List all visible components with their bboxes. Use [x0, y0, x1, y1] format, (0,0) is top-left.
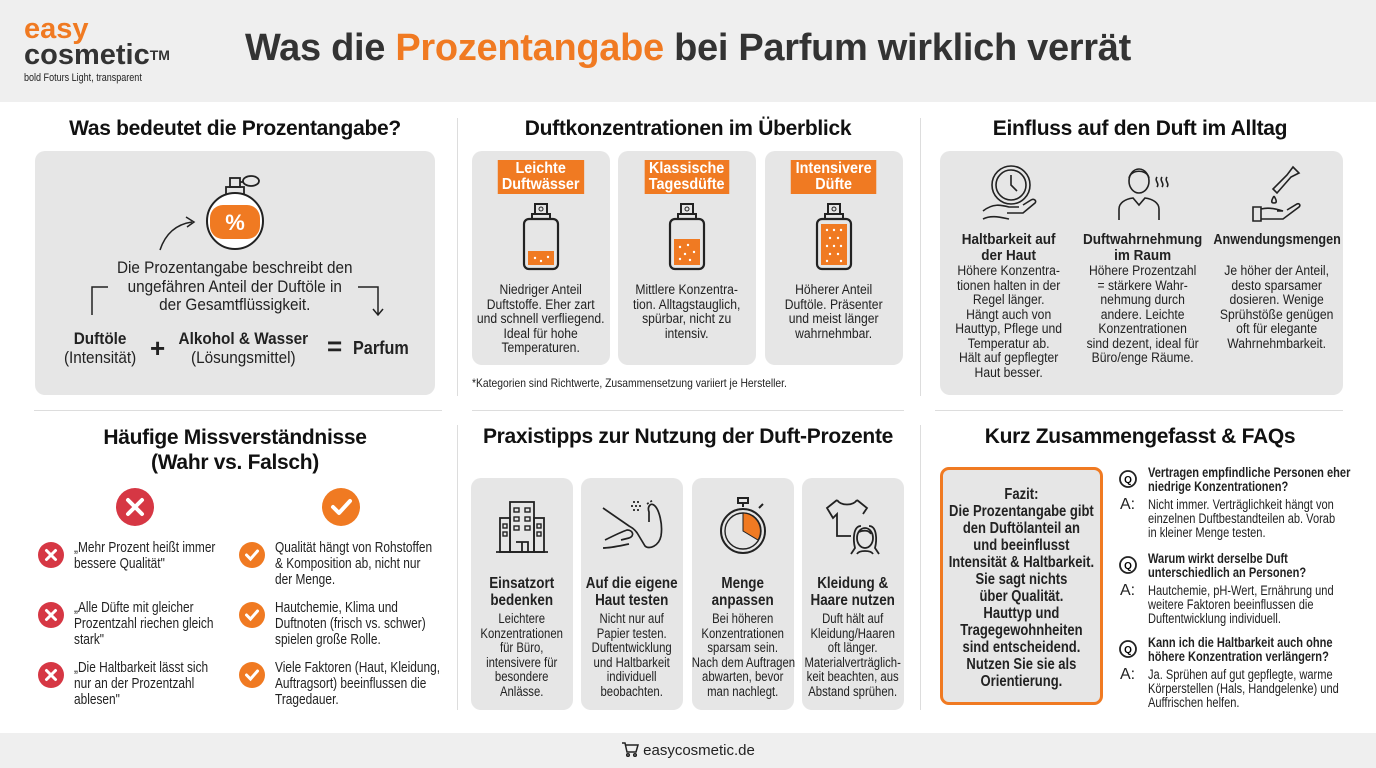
list: wahr: Auftragsort) beeinflussen die — [275, 676, 426, 692]
heading: Was bedeutet die Prozentangabe? — [69, 117, 401, 140]
FAQ list: Auffrischen helfen. — [1148, 695, 1239, 710]
heading: Häufige Missverständnisse — [103, 426, 367, 449]
card: intensiv: und meist länger — [789, 311, 879, 326]
formula — [64, 329, 409, 367]
list: wahr: & Komposition ab, nicht nur — [275, 556, 420, 572]
item: Raum: nehmung durch — [1101, 292, 1185, 307]
list: falsch: „Die Haltbarkeit lässt sich — [74, 660, 208, 676]
callout: Fazit: Nutzen Sie sie als — [967, 656, 1077, 673]
callout: Fazit: Hauttyp und — [984, 605, 1059, 622]
callout: Fazit: Sie sagt nichts — [976, 571, 1067, 588]
card: klassisch: Klassische — [649, 160, 725, 177]
card: Kleidung: Materialverträglich- — [805, 654, 901, 670]
card: Kleidung: oft länger. — [828, 640, 878, 655]
text block: ungefähren Anteil der Duftöle in — [128, 276, 342, 296]
card: Menge: Menge — [722, 575, 764, 592]
formula: (Lösungsmittel) — [191, 348, 295, 367]
panel: Duftkonzentrationen — [472, 116, 903, 390]
card: Einsatzort: besondere — [495, 669, 549, 684]
gray box — [35, 151, 435, 395]
FAQ list: Q — [1124, 475, 1132, 486]
heading: Duftkonzentrationen im Überblick — [525, 117, 851, 140]
logo: easy — [24, 13, 89, 45]
text block: Die Prozentangabe beschreibt den — [117, 258, 353, 277]
callout: Fazit: und beeinflusst — [973, 537, 1070, 554]
FAQ list: A: — [1120, 666, 1135, 683]
callout: Fazit: sind entscheidend. — [963, 639, 1080, 656]
callout: Fazit: den Duftölanteil an — [963, 520, 1080, 537]
card: intensiv: Düfte — [816, 176, 852, 193]
card: Haut testen: Nicht nur auf — [600, 611, 664, 626]
text block — [117, 258, 353, 314]
list: falsch: Prozentzahl riechen gleich — [74, 616, 213, 632]
footer — [0, 733, 1376, 768]
footer: easycosmetic.de — [643, 742, 755, 759]
card: Kleidung: Duft hält auf — [822, 611, 884, 626]
item: Haltbarkeit: Hängt auch von — [966, 306, 1052, 322]
panel: Einfluss — [940, 117, 1343, 395]
card: Menge: sparsam sein. — [708, 640, 778, 655]
card: Kleidung: Abstand sprühen. — [809, 684, 897, 698]
formula: = — [327, 331, 342, 361]
item: Haltbarkeit: Hauttyp, Pflege und — [956, 321, 1062, 336]
card: intensiv: Höherer Anteil — [795, 282, 873, 297]
card: Menge: Nach dem Auftragen — [692, 654, 795, 670]
item: Haltbarkeit: Haut besser. — [975, 364, 1043, 380]
list: falsch: „Mehr Prozent heißt immer — [74, 540, 215, 556]
card: intensiv: Intensivere — [796, 160, 872, 177]
card: intensiv: Duftöle. Präsenter — [785, 296, 883, 312]
card: leicht: Duftstoffe. Eher zart — [487, 296, 595, 312]
card: Kleidung: Haare nutzen — [811, 592, 895, 609]
heading: (Wahr vs. Falsch) — [151, 451, 319, 474]
card: intensiv: wahrnehmbar. — [795, 326, 873, 340]
card: Haut testen: beobachten. — [601, 684, 663, 698]
card: Haut testen: Duftentwicklung — [592, 640, 672, 655]
item: Haltbarkeit: Höhere Konzentra- — [958, 263, 1060, 278]
card: Haut testen: Haut testen — [595, 592, 669, 609]
item: Anwendungsmengen: Sprühstöße genügen — [1220, 306, 1334, 322]
FAQ list: Nicht immer. Verträglichkeit hängt von — [1148, 497, 1334, 512]
formula: (Intensität) — [64, 348, 136, 367]
FAQ list: Q — [1124, 645, 1132, 656]
list: wahr: Viele Faktoren (Haut, Kleidung, — [275, 660, 440, 676]
card: Einsatzort: intensivere für — [486, 654, 558, 670]
header band — [0, 0, 1376, 102]
FAQ list: Ja. Sprühen auf gut gepflegte, warme — [1148, 667, 1333, 682]
list: falsch: „Alle Düfte mit gleicher — [74, 600, 194, 616]
item: Anwendungsmengen — [1213, 166, 1341, 350]
card: leicht — [472, 151, 610, 365]
panel: Praxistipps — [471, 425, 904, 710]
formula: Duftöle — [74, 329, 126, 348]
icon: perfume bottle: % — [225, 210, 245, 235]
FAQ list: A: — [1120, 496, 1135, 513]
text block: der Gesamtflüssigkeit. — [159, 295, 311, 314]
heading: Praxistipps zur Nutzung der Duft-Prozente — [483, 425, 893, 448]
formula: + — [150, 333, 165, 363]
card: klassisch: tion. Alltagstauglich, — [633, 296, 741, 312]
FAQ list: Kann ich die Haltbarkeit auch ohne — [1148, 635, 1333, 650]
item: Raum: sind dezent, ideal für — [1087, 336, 1199, 350]
item: Raum: Duftwahrnehmung — [1083, 231, 1203, 248]
item: Raum: im Raum — [1114, 247, 1172, 264]
item: Anwendungsmengen: Wahrnehmbarkeit. — [1228, 336, 1326, 350]
item: Haltbarkeit: Temperatur ab. — [968, 336, 1050, 350]
item: Raum: andere. Leichte — [1101, 306, 1185, 322]
item: Haltbarkeit — [956, 165, 1062, 380]
item: Raum: Büro/enge Räume. — [1092, 350, 1194, 365]
card: Einsatzort: Anlässe. — [500, 684, 544, 698]
card: Kleidung: Kleidung & — [818, 575, 888, 592]
footnote: *Kategorien sind Richtwerte, Zusammensetzung variiert je Hersteller. — [472, 376, 787, 390]
logo — [24, 13, 170, 84]
list: wahr: Duftnoten (frisch vs. schwer) — [275, 616, 426, 632]
card: klassisch: Mittlere Konzentra- — [636, 282, 738, 297]
card: Einsatzort — [471, 478, 573, 710]
FAQ list — [1119, 465, 1350, 710]
card: leicht: Temperaturen. — [502, 340, 580, 355]
card: klassisch: spürbar, nicht zu — [642, 311, 732, 326]
FAQ list: Q — [1124, 561, 1132, 572]
card: Menge: man nachlegt. — [707, 684, 779, 698]
card: leicht: Duftwässer — [502, 176, 580, 193]
item: Raum: = stärkere Wahr- — [1098, 278, 1188, 292]
panel: Zusammengefasst — [940, 425, 1350, 710]
card: Einsatzort: Konzentrationen — [481, 626, 563, 640]
FAQ list: einzelnen Duftbestandteilen ab. Vorab — [1148, 511, 1335, 526]
bracket arrows — [91, 286, 384, 316]
list: falsch: ablesen" — [74, 692, 120, 708]
card: Menge: Bei höheren — [712, 611, 774, 626]
heading — [103, 426, 367, 474]
item: Haltbarkeit: tionen halten in der — [957, 278, 1061, 292]
item: Anwendungsmengen: Anwendungsmengen — [1213, 231, 1341, 248]
FAQ list: Duftentwicklung individuell. — [1148, 611, 1281, 626]
panel: Missverständnisse — [38, 426, 440, 708]
list: wahr: Tragedauer. — [275, 692, 339, 708]
FAQ list: weitere Faktoren beeinflussen die — [1148, 597, 1314, 612]
callout: Fazit — [940, 467, 1103, 705]
item: Anwendungsmengen: Je höher der Anteil, — [1225, 263, 1329, 278]
list: falsch: nur an der Prozentzahl — [74, 676, 194, 692]
formula: Parfum — [353, 338, 409, 358]
card: Haut testen: Papier testen. — [597, 626, 667, 640]
card: leicht: Leichte — [516, 160, 566, 177]
icon: big check — [322, 488, 360, 526]
callout: Fazit: Fazit: — [1005, 486, 1038, 503]
card: Menge: anpassen — [712, 592, 774, 609]
icon: perfume bottle — [159, 175, 264, 250]
FAQ list: in kleiner Menge testen. — [1148, 525, 1266, 540]
callout: Fazit: Tragegewohnheiten — [960, 622, 1083, 639]
FAQ list: Hautchemie, pH-Wert, Ernährung und — [1148, 583, 1334, 598]
item: Raum: Höhere Prozentzahl — [1089, 263, 1197, 278]
card: Einsatzort: für Büro, — [500, 640, 544, 655]
card: Kleidung: Kleidung/Haaren — [811, 626, 895, 640]
FAQ list: Körperstellen (Hals, Handgelenke) und — [1148, 681, 1339, 696]
item: Anwendungsmengen: desto sparsamer — [1232, 278, 1322, 292]
item: Haltbarkeit: Regel länger. — [973, 292, 1045, 307]
FAQ list: Warum wirkt derselbe Duft — [1148, 551, 1288, 566]
heading: Kurz Zusammengefasst & FAQs — [985, 425, 1295, 448]
callout: Fazit: Intensität & Haltbarkeit. — [949, 554, 1094, 571]
card: Einsatzort: Leichtere — [499, 611, 545, 626]
list: falsch: stark" — [74, 632, 104, 648]
card: klassisch: intensiv. — [665, 326, 709, 340]
card: leicht: Niedriger Anteil — [500, 282, 582, 297]
FAQ list: unterschiedlich an Personen? — [1148, 565, 1306, 580]
card: leicht: Ideal für hohe — [504, 326, 578, 340]
icon: cart — [622, 742, 639, 757]
logo: bold Foturs Light, transparent — [24, 72, 142, 84]
card: Haut testen: individuell — [607, 669, 657, 684]
card: Menge: abwarten, bevor — [702, 669, 784, 684]
item: Raum: Konzentrationen — [1099, 321, 1187, 336]
card: Haut testen — [581, 478, 683, 710]
list: wahr: Qualität hängt von Rohstoffen — [275, 540, 432, 556]
card: intensiv — [765, 151, 903, 365]
callout: Fazit: Die Prozentangabe gibt — [949, 503, 1094, 520]
card: klassisch: Tagesdüfte — [649, 176, 725, 193]
list: falsch: bessere Qualität" — [74, 556, 165, 572]
card: klassisch — [618, 151, 756, 365]
card: Einsatzort: Einsatzort — [490, 575, 554, 592]
card: Haut testen: Auf die eigene — [586, 575, 678, 592]
card: Kleidung: keit beachten, aus — [807, 669, 899, 684]
FAQ list: Vertragen empfindliche Personen eher — [1148, 465, 1350, 480]
heading: Einfluss auf den Duft im Alltag — [993, 117, 1287, 140]
FAQ list: höhere Konzentration verlängern? — [1148, 649, 1329, 664]
item: Anwendungsmengen: dosieren. Wenige — [1230, 292, 1324, 307]
card: Menge: Konzentrationen — [702, 626, 784, 640]
item: Haltbarkeit: Haltbarkeit auf — [962, 231, 1056, 248]
list: wahr: Hautchemie, Klima und — [275, 600, 398, 616]
list: falsch — [38, 540, 216, 708]
FAQ list: niedrige Konzentrationen? — [1148, 479, 1288, 494]
card: Einsatzort: bedenken — [491, 592, 553, 609]
list: wahr — [239, 540, 440, 708]
item: Haltbarkeit: Hält auf gepflegter — [959, 350, 1059, 365]
formula: Alkohol & Wasser — [178, 329, 308, 348]
item: Haltbarkeit: der Haut — [982, 247, 1036, 264]
card: Menge — [692, 478, 794, 710]
card: Kleidung — [802, 478, 904, 710]
callout: Fazit: Orientierung. — [981, 673, 1062, 690]
icon: big X — [116, 488, 154, 526]
card: Haut testen: und Haltbarkeit — [594, 654, 670, 670]
item: Anwendungsmengen: oft für elegante — [1236, 321, 1318, 336]
card: leicht: und schnell verfliegend. — [477, 311, 605, 326]
callout: Fazit: über Qualität. — [980, 588, 1063, 605]
title: Was die Prozentangabe bei Parfum wirklich verrät — [245, 27, 1131, 69]
panel: Was bedeutet — [35, 117, 435, 395]
logo: cosmeticTM — [24, 39, 170, 71]
item: Raum — [1083, 168, 1203, 365]
list: wahr: der Menge. — [275, 572, 335, 588]
list: wahr: spielen große Rolle. — [275, 632, 381, 648]
FAQ list: A: — [1120, 582, 1135, 599]
